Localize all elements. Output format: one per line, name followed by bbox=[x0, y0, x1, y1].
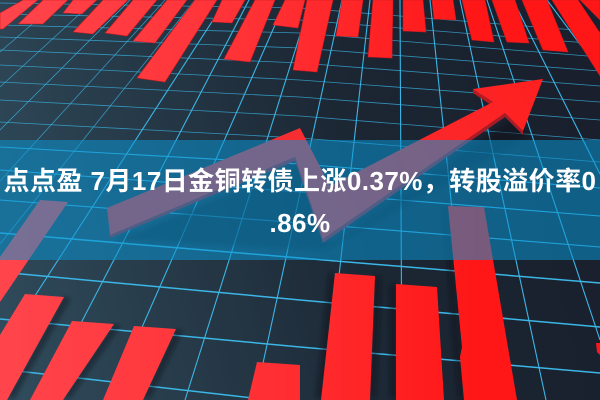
title text: .86% bbox=[269, 208, 331, 238]
back row of red bars bbox=[0, 0, 600, 82]
title text bbox=[4, 166, 596, 238]
front bar shadows bbox=[7, 206, 464, 398]
title text: 点点盈 7月17日金铜转债上涨0.37%，转股溢价率0 bbox=[4, 166, 596, 196]
rising red arrow bbox=[107, 79, 543, 243]
arrow shadow bbox=[115, 120, 530, 250]
front row of red bars bbox=[0, 200, 600, 400]
translucent title band bbox=[0, 140, 600, 260]
